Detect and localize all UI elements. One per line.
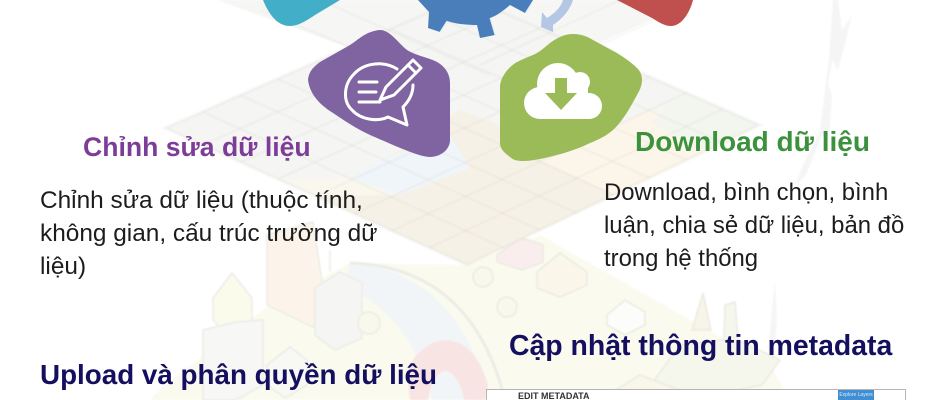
upper isometric plate [217,0,697,95]
icon: edit data purple blob [308,30,450,157]
text: edit data description: Chỉnh sửa dữ liệu (thuộc tính, [40,187,363,214]
text: edit data description [40,187,377,280]
heading: edit data: Chỉnh sửa dữ liệu [83,132,311,162]
faded city illustration [150,222,790,400]
heading: update metadata: Cập nhật thông tin metadata [509,330,892,362]
icon: download green blob [500,34,642,161]
lower isometric plate [165,0,760,265]
buildings left [203,222,362,400]
text: download description: Download, bình chọn, bình [604,179,888,206]
icon: cloud with download arrow [524,63,602,119]
heading: download data: Download dữ liệu [635,126,870,157]
icon: blue gear [418,0,533,38]
text: download description: luận, chia sẻ dữ liệu, bản đồ [604,212,904,239]
text: edit data description: không gian, cấu trúc trường dữ [40,220,377,247]
heading: upload and permissions: Upload và phân quyền dữ liệu [40,359,437,390]
button: explore layers: Explore Layers [839,392,873,398]
text: edit data description: liệu) [40,253,86,280]
trees [358,267,517,334]
text: download description: trong hệ thống [604,245,758,272]
river and rainbow arch [345,263,490,400]
icon: red blob [617,0,693,26]
icon: speech bubble with pencil [345,60,421,125]
text: download description [604,179,904,272]
houses right [497,237,780,400]
arrow: curved light blue [541,0,573,32]
icon: teal blob [263,0,340,26]
faded brush strokes [764,0,852,400]
screenshot: edit metadata panel [486,389,906,400]
button: explore layers [838,390,874,400]
